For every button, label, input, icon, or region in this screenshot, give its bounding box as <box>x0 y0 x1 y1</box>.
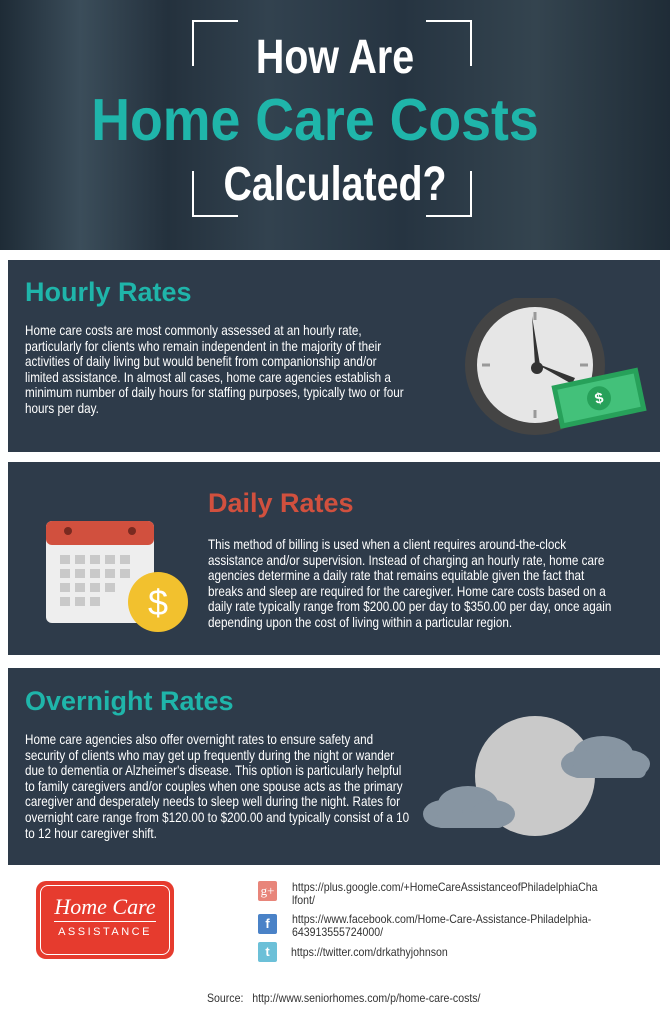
icon: twitter: t <box>265 944 270 959</box>
icon: calendar with coin <box>46 521 188 632</box>
link: facebook <box>292 912 591 939</box>
link: twitter: https://twitter.com/drkathyjohnson <box>291 945 448 959</box>
link: facebook: https://www.facebook.com/Home-Care-Assistance-Philadelphia- <box>292 912 591 926</box>
title: Home Care Costs <box>91 87 539 153</box>
logo: home care assistance: ASSISTANCE <box>58 926 152 938</box>
title <box>91 31 539 211</box>
link: google: lfont/ <box>292 893 315 907</box>
heading: overnight: Overnight Rates <box>25 686 234 716</box>
text: daily: This method of billing is used when a client requires around-the-clock assistance and/or supervision. Instead of charging an hourly rate, home care agencies determine a daily rate that remains equitable given the fact that breaks and sleep are required for the caregiver. Home care costs based on a daily rate typically range from $200.00 per day to $350.00 per day, once again depending upon the cost of living within a particular region. <box>208 537 611 630</box>
heading: hourly: Hourly Rates <box>25 277 192 307</box>
icon: twitter <box>258 942 277 962</box>
icon: calendar with coin: $ <box>148 582 168 623</box>
header banner <box>0 0 670 250</box>
icon: moon and clouds <box>423 716 650 836</box>
icon: google plus <box>258 881 277 901</box>
panel: overnight rates <box>8 668 660 865</box>
icon: clock with money <box>465 298 647 435</box>
heading: daily: Daily Rates <box>208 488 354 518</box>
text: hourly: Home care costs are most commonly assessed at an hourly rate, particularly for clients who remain independent in the majority of their activities of daily living but would benefit from companionship and/or limited assistance. In almost all cases, home care agencies establish a minimum number of daily hours for staffing purposes, typically two or four hours per day. <box>25 323 404 416</box>
panel: hourly rates <box>8 260 660 452</box>
panel: daily rates <box>8 462 660 655</box>
title: Calculated? <box>223 158 447 211</box>
text: overnight: Home care agencies also offer overnight rates to ensure safety and security of clients who may get up frequently during the night or wander due to dementia or Alzheimer's disease. This option is particularly helpful to family caregivers and/or couples when one spouse acts as the primary caregiver and desperately needs to sleep well during the night. Rates for overnight care range from $120.00 to $200.00 and typically consist of a 10 to 12 hour caregiver shift. <box>25 732 409 841</box>
link: google: https://plus.google.com/+HomeCareAssistanceofPhiladelphiaCha <box>292 880 598 894</box>
icon: google plus: g+ <box>261 883 274 898</box>
link: google <box>292 880 598 907</box>
icon: facebook <box>258 914 277 934</box>
icon: clock with money: $ <box>593 389 606 408</box>
logo: home care assistance <box>36 881 174 959</box>
bracket frame <box>192 20 472 217</box>
link: facebook: 643913555724000/ <box>292 925 383 939</box>
icon: facebook: f <box>265 916 270 931</box>
social links <box>258 880 598 962</box>
logo: home care assistance: Home Care <box>54 894 156 919</box>
title: How Are <box>256 31 414 84</box>
source: Source: http://www.seniorhomes.com/p/home-care-costs/ <box>207 991 481 1005</box>
